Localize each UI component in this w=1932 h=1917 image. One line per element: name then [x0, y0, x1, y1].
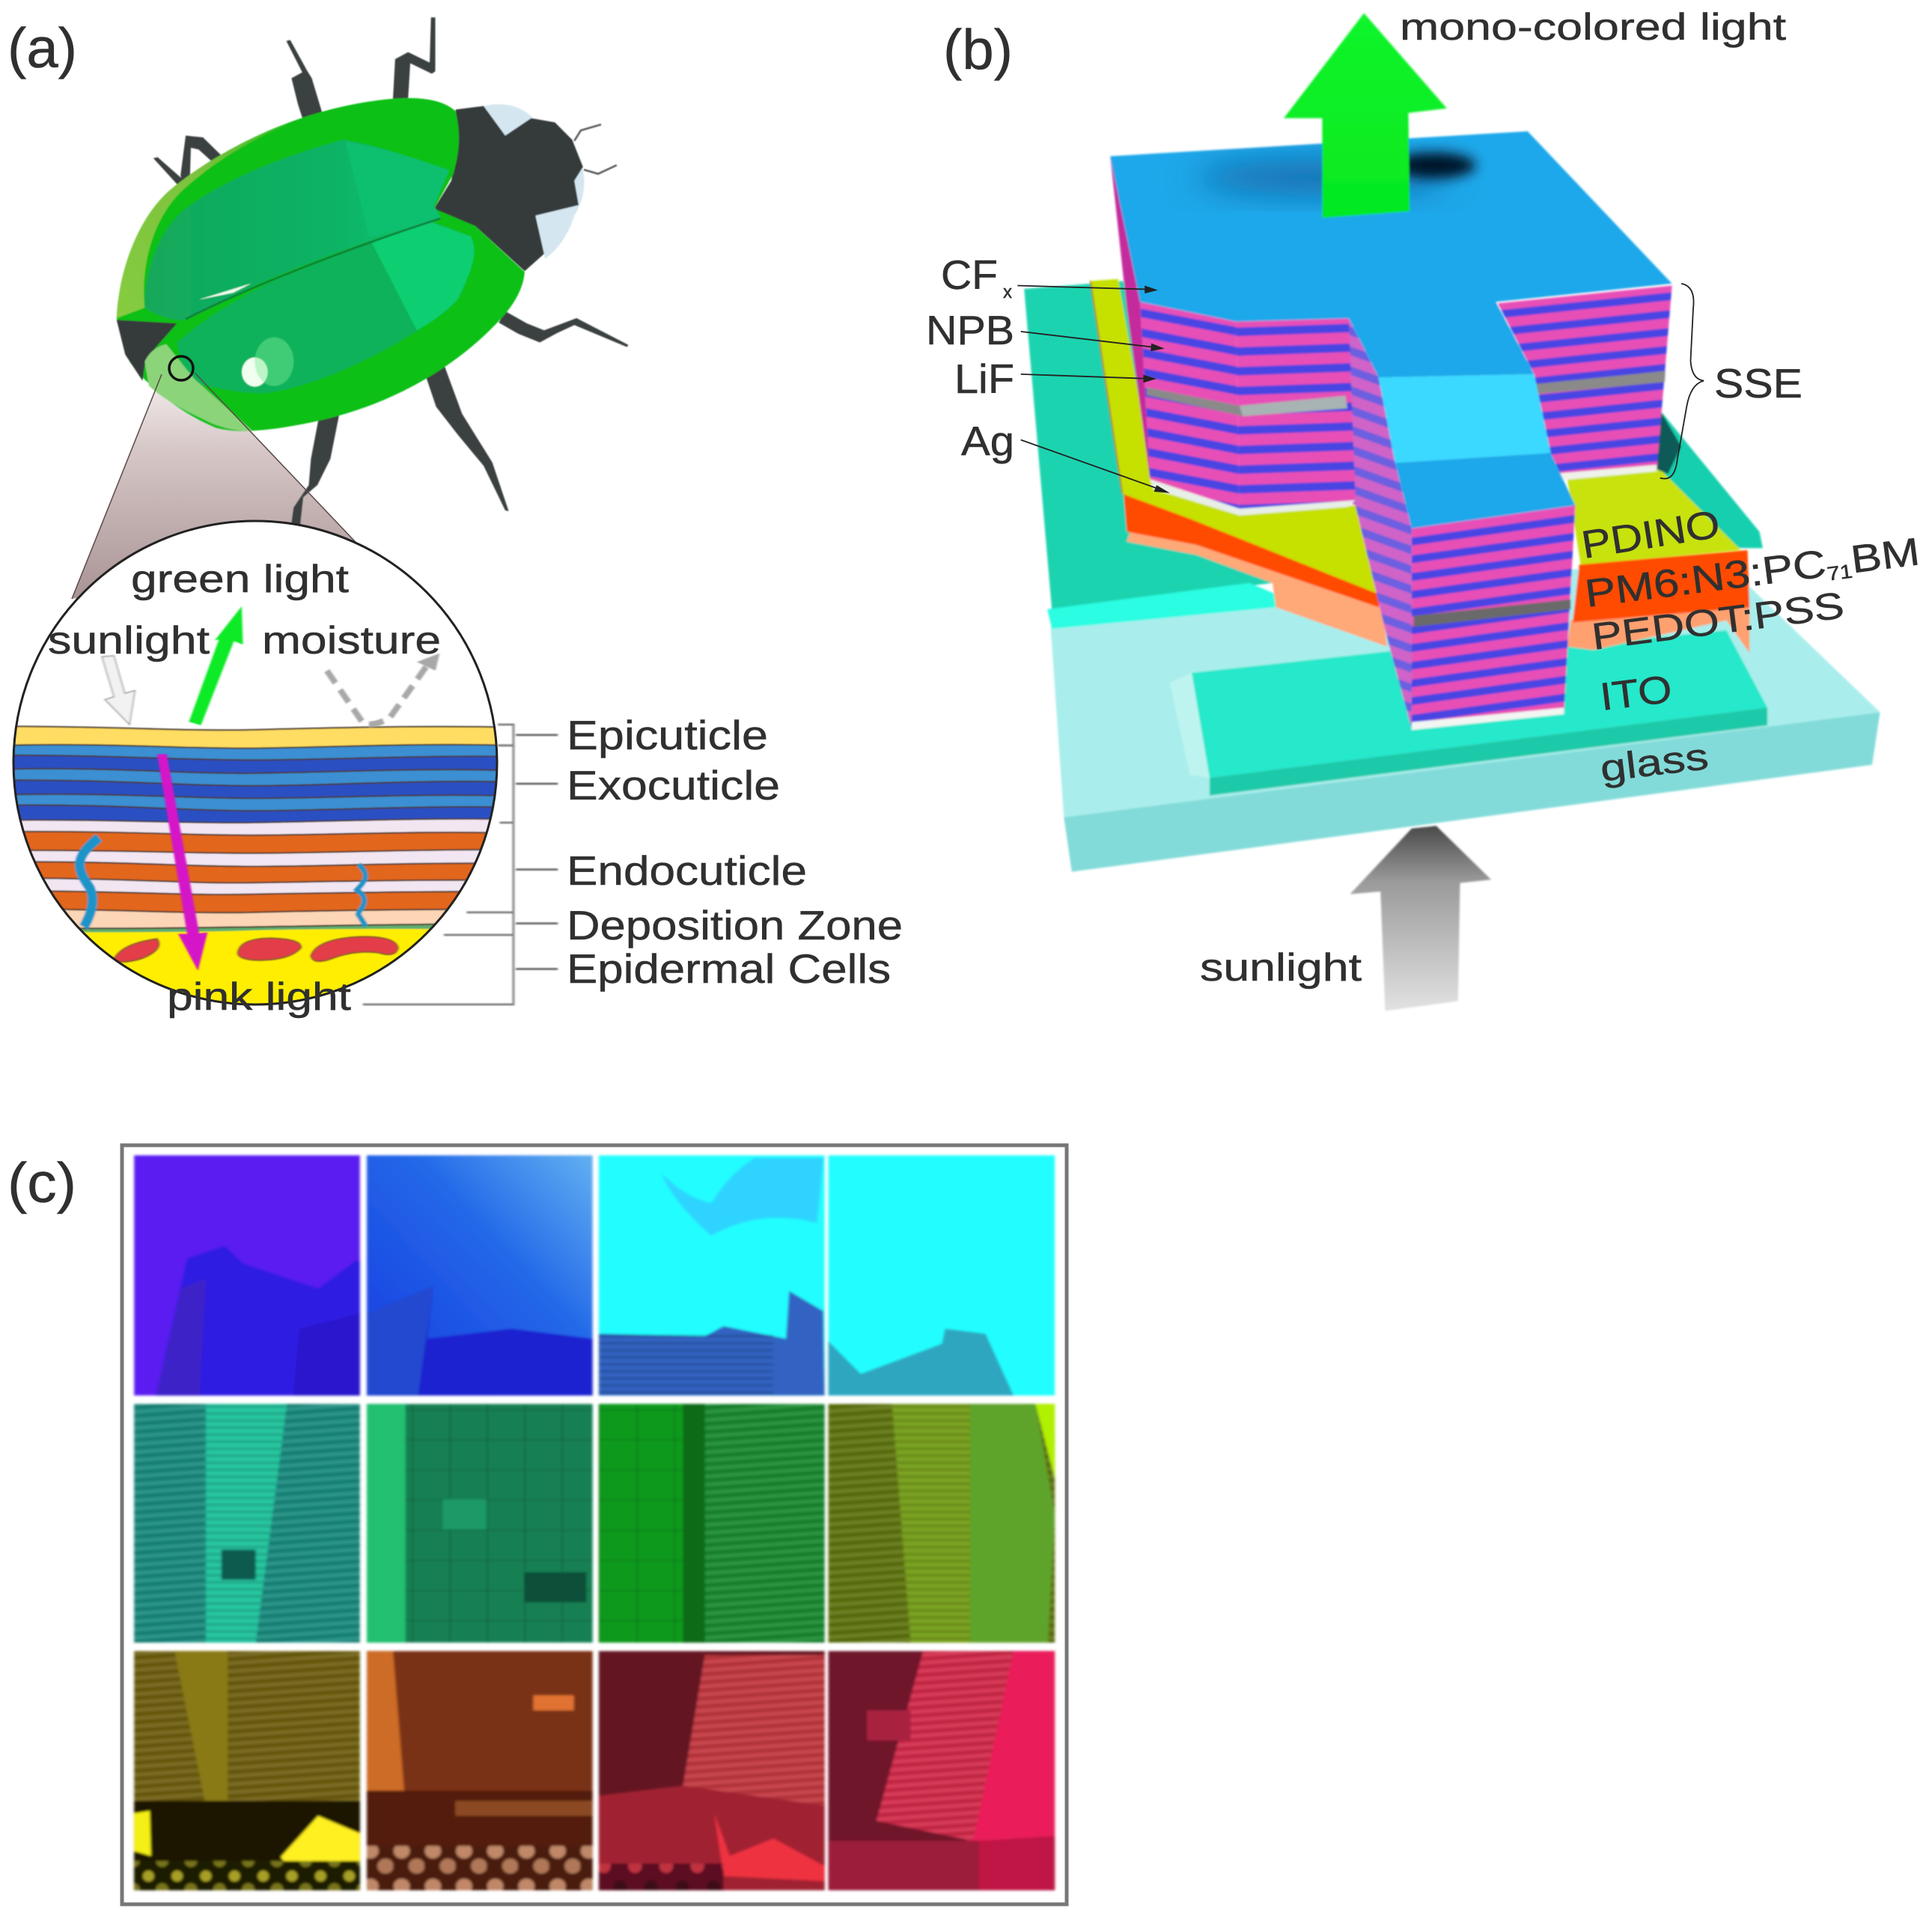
photo: blue: [367, 1155, 593, 1395]
cuticle layer labels: [567, 712, 903, 992]
panel b labels: LiF: [954, 356, 1014, 402]
arrow: mono-colored light: [1284, 13, 1447, 218]
bracket lines: [363, 725, 558, 1005]
cuticle layer labels: Exocuticle: [567, 762, 780, 808]
PM6:N3:PC71BM active layer: [1124, 493, 1749, 622]
cuticle layer labels: Epicuticle: [567, 712, 768, 758]
panel label (c): (c): [7, 1151, 76, 1214]
magnified cross-section circle: [0, 520, 510, 1031]
arrow: moisture dashed: [327, 665, 427, 725]
device stack illustration: [1024, 13, 1880, 1011]
panel b labels: mono-colored light: [1400, 6, 1786, 48]
panel b labels: CF: [941, 252, 998, 298]
right shadow: [1657, 410, 1681, 474]
panel c: building photographs through coloured SSE filters: [7, 1145, 1067, 1904]
photo: brown-orange: [367, 1651, 593, 1890]
pointer arrows and SSE brace: [1017, 284, 1704, 493]
arrow: pink light: [157, 754, 207, 971]
labels inside circle: green light: [131, 558, 350, 601]
labels inside circle: moisture: [262, 619, 441, 662]
panel b labels: NPB: [926, 307, 1014, 353]
PDINO layer: [1091, 279, 1741, 594]
arrow: green light: [189, 606, 243, 725]
magnifier cone: [72, 373, 367, 599]
arrow: incoming sunlight: [1350, 826, 1491, 1011]
panel label (a): (a): [7, 16, 77, 79]
panel b labels: PEDOT:PSS: [1589, 584, 1847, 658]
panel b labels: sunlight: [1200, 946, 1362, 990]
photo grid: [134, 1155, 1055, 1890]
SSE stack side facets: [1110, 156, 1412, 728]
photo: red: [599, 1651, 825, 1890]
panel b: device structure: [926, 6, 1922, 1011]
panel a: beetle and cuticle cross-section: [0, 16, 903, 1031]
labels inside circle: sunlight: [48, 619, 210, 662]
photo: crimson: [829, 1651, 1055, 1890]
photo: olive: [134, 1651, 360, 1890]
panel label (b): (b): [943, 18, 1013, 81]
photo: cyan-blue: [599, 1155, 825, 1395]
CFx top surface: [1110, 131, 1672, 528]
panel b labels: 71: [1826, 561, 1854, 585]
panel b labels: SSE: [1714, 360, 1803, 406]
cuticle layer labels: Endocuticle: [567, 847, 807, 894]
panel b labels: ITO: [1597, 668, 1674, 719]
panel b labels: Ag: [961, 418, 1014, 464]
photo: cyan: [829, 1155, 1055, 1395]
PEDOT:PSS layer: [1127, 531, 1749, 653]
labels inside circle: [48, 558, 441, 1019]
front ITO electrode: [1192, 630, 1767, 796]
panel b labels: PDINO: [1579, 502, 1723, 567]
glass substrate: [1051, 558, 1880, 872]
photo: lime: [829, 1404, 1055, 1642]
labels inside circle: pink light: [167, 975, 352, 1019]
panel b labels: x: [1003, 282, 1012, 302]
panel b labels: PM6:N3:PC: [1582, 543, 1829, 616]
panel b labels: [926, 6, 1922, 990]
back ITO electrode: [1024, 281, 1763, 629]
arrow: sunlight: [102, 656, 135, 725]
cuticle layer labels: Epidermal Cells: [567, 945, 891, 992]
arrows in cross-section: [102, 606, 439, 971]
right SSE stack: [1498, 285, 1672, 481]
beetle illustration: [117, 17, 628, 525]
photo: teal: [134, 1404, 360, 1642]
cone edge lines and magnified spot: [72, 356, 367, 599]
cuticle layer labels: Deposition Zone: [567, 902, 903, 948]
front SSE stack: [1412, 505, 1575, 730]
left SSE stack: [1140, 302, 1356, 515]
photo: sea green: [367, 1404, 593, 1642]
panel b labels: BM: [1848, 530, 1922, 582]
photo: violet: [134, 1155, 360, 1395]
photo frame: [122, 1145, 1067, 1904]
panel b labels: glass: [1598, 735, 1710, 790]
photo: green: [599, 1404, 825, 1642]
